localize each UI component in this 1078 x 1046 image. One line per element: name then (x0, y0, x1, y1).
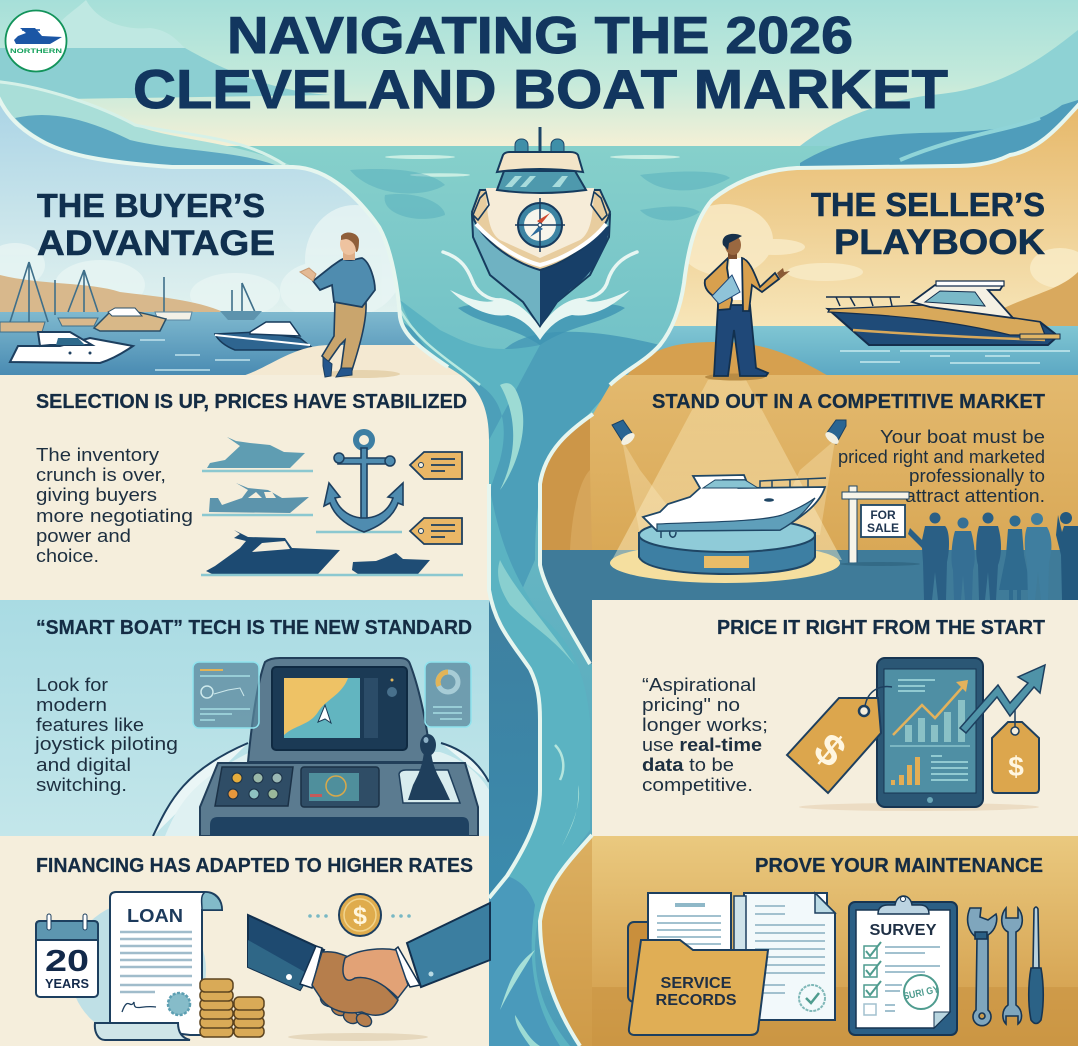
icon: small price tag (992, 707, 1039, 793)
dark channel between panels (489, 590, 540, 898)
icon: helm console (153, 658, 489, 836)
heading: the buyer's advantage: ADVANTAGE (37, 224, 275, 263)
clouds (677, 204, 1078, 288)
yacht: seller (826, 281, 1060, 345)
body text: smart boat (34, 674, 178, 795)
heading: smart boat: “SMART BOAT” TECH IS THE NEW STANDARD (36, 616, 472, 639)
body text: smart boat: features like (36, 714, 144, 735)
icon: floating display right (425, 662, 471, 727)
icon: shadow (288, 1033, 428, 1041)
water (626, 326, 1078, 375)
icon: calendar 20 years: 20 (45, 943, 89, 978)
headings: side titles (37, 187, 275, 263)
heading: stand out: STAND OUT IN A COMPETITIVE MARKET (652, 390, 1045, 413)
body text: smart boat: Look for (36, 674, 108, 695)
icon: large price tag: $ (805, 724, 855, 777)
heading: the buyer's advantage (37, 187, 275, 263)
icon: price tags (410, 452, 462, 544)
heading: the seller's playbook (811, 186, 1045, 262)
body text: stand out: professionally to (909, 465, 1045, 486)
person: seller (705, 234, 790, 380)
body text: price: longer works; (642, 714, 768, 735)
panel: prove your maintenance (530, 836, 1078, 1046)
icon: large price tag (787, 687, 892, 793)
clouds (0, 205, 395, 304)
body text: stand out (839, 430, 1044, 502)
body text: smart boat: modern (36, 694, 107, 715)
person: buyer (300, 233, 400, 378)
body text: smart boat: and digital (36, 754, 131, 775)
heading: the buyer's advantage: THE BUYER’S (37, 187, 265, 224)
body text: selection: power and (36, 525, 131, 546)
icon: tools (968, 907, 1043, 1026)
body text: selection: more negotiating (36, 505, 193, 526)
logo (6, 10, 66, 72)
body text: selection (36, 444, 193, 566)
icon: handshake (248, 903, 490, 1029)
body text: smart boat: joystick piloting (34, 733, 178, 754)
scene background: buyer sky (0, 106, 398, 312)
body text: price (642, 674, 768, 795)
light beams (612, 380, 842, 560)
icon: for sale sign (840, 486, 920, 566)
icon: dollar coin (308, 894, 411, 936)
water highlights (140, 340, 250, 370)
icon: boat silhouettes (201, 437, 463, 575)
body text: price: use real-time (642, 734, 762, 755)
icon: for sale sign: SALE (867, 521, 899, 535)
icon: floating display left (193, 662, 259, 728)
panel: selection is up (0, 375, 500, 601)
shaded left hill (542, 418, 590, 550)
body text: selection: The inventory (36, 444, 160, 465)
sand island (628, 342, 826, 375)
title: CLEVELAND BOAT MARKET (133, 58, 948, 120)
panel: the seller's playbook (626, 108, 1078, 375)
pedestal (610, 518, 840, 583)
body text: selection: giving buyers (36, 484, 157, 505)
sand (246, 345, 466, 380)
body text: stand out: Your boat must be (880, 426, 1045, 447)
body text: selection: crunch is over, (36, 464, 166, 485)
hill (1000, 272, 1078, 326)
water (0, 312, 460, 375)
floor (530, 550, 1078, 670)
river: central flowing water (400, 300, 660, 1046)
icon: loan document (95, 892, 222, 1040)
panel: the buyer's advantage (0, 106, 466, 380)
heading: prove: PROVE YOUR MAINTENANCE (755, 854, 1043, 877)
crowd silhouettes (908, 512, 1078, 600)
icon: coin stacks (200, 979, 264, 1037)
icon: calendar 20 years: YEARS (45, 976, 89, 991)
icon: service documents: SERVICE (660, 975, 732, 992)
body text: price: pricing" no (642, 694, 740, 715)
icon: central yacht (443, 127, 637, 345)
icon: service documents: RECORDS (656, 992, 736, 1009)
panel: financing (0, 836, 490, 1046)
icon: small price tag: $ (1008, 751, 1024, 782)
heading: the seller's playbook: THE SELLER’S (811, 186, 1045, 223)
arrow: rising trend (960, 665, 1045, 733)
panel: smart boat tech (0, 600, 489, 836)
heading: selection: SELECTION IS UP, PRICES HAVE STABILIZED (36, 390, 467, 413)
panel: stand out (530, 375, 1078, 670)
icon: compass (515, 198, 565, 252)
icon: spotlights (612, 420, 846, 447)
icon: survey clipboard (849, 896, 957, 1035)
body text: price: competitive. (642, 774, 753, 795)
foam wake (443, 252, 637, 340)
icon: service documents (628, 893, 835, 1035)
icon: for sale sign: FOR (870, 508, 896, 522)
body text: price: “Aspirational (642, 674, 756, 695)
icon: loan document: LOAN (127, 906, 183, 926)
sailboats (10, 262, 255, 322)
heading: the seller's playbook: PLAYBOOK (834, 223, 1045, 262)
yacht: back tan (94, 310, 166, 331)
title: NAVIGATING THE 2026 (227, 7, 853, 65)
body text: price: data to be (642, 754, 734, 775)
icon: tablet chart (799, 658, 1039, 811)
icon: survey clipboard: SURVEY (870, 922, 937, 939)
yacht: white foreground (10, 332, 133, 363)
logo: NORTHERN (10, 49, 62, 55)
hill (0, 275, 221, 312)
icon: dollar coin: $ (353, 902, 367, 930)
body text: smart boat: switching. (36, 774, 127, 795)
heading: price it right: PRICE IT RIGHT FROM THE START (717, 616, 1045, 639)
heading: financing: FINANCING HAS ADAPTED TO HIGHER RATES (36, 854, 473, 877)
icon: survey clipboard: SURI GY (903, 984, 940, 1003)
icon: anchor (324, 432, 403, 532)
title (133, 7, 948, 120)
icon: calendar 20 years (36, 914, 98, 997)
body text: stand out: priced right and marketed (838, 446, 1045, 467)
icon: backdrop circle (70, 902, 206, 1038)
panel: price it right (592, 600, 1078, 836)
yacht: showcased (643, 475, 826, 538)
yacht: navy foreground (215, 322, 315, 350)
body text: selection: choice. (36, 545, 99, 566)
body text: stand out: attract attention. (905, 485, 1045, 506)
